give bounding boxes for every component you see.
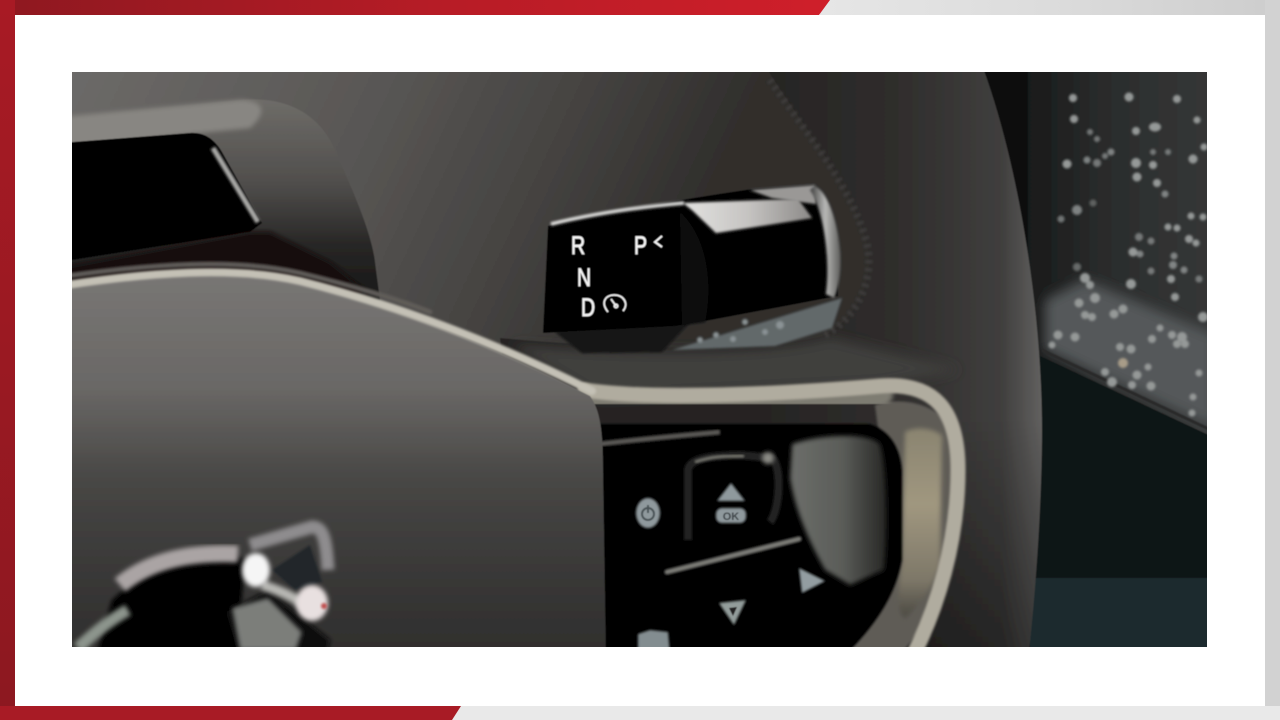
glossy panel reflection [790,436,887,585]
stalk body [543,185,838,333]
inner trim recess [852,400,952,647]
frame: left red bar [0,0,15,720]
icon: up button with OK [716,483,746,523]
frame: top bar [0,0,1280,15]
icon: down button [719,600,746,625]
frame: bottom bar [0,706,1280,720]
lower door teal reflection [1030,578,1207,647]
icon: speed gauge [604,295,626,312]
gear labels: N [577,264,591,292]
gear labels [571,232,647,322]
chrome end ring [810,186,841,298]
wheel hub [60,274,606,660]
silver trim left band [60,264,592,391]
beige inner trim [898,429,942,618]
wheel rim [500,60,1042,660]
view through gap under stalk [672,298,842,350]
rain droplets [1048,92,1208,416]
gear labels: R [571,232,585,260]
divider bar [667,539,799,572]
photo: steering wheel with gear selector stalk [60,60,1220,665]
control panel [600,424,902,660]
frame: right grey bar [1265,0,1280,720]
upper highlight [683,199,812,233]
logo on hub [78,527,330,660]
icon: power button [636,498,660,528]
gear labels: D [581,294,595,322]
dashboard background [72,72,870,354]
gear labels: P [634,232,647,260]
instrument hood [60,99,380,300]
icon: lower left button [636,628,671,647]
icon: right button [799,568,825,593]
gear stalk [543,185,841,353]
window with rain droplets [984,72,1207,647]
button surround [688,455,779,540]
icon: park indicator chevron [655,236,662,247]
icon: up button with OK: OK [723,511,739,523]
hood light upper strip [72,98,262,143]
door sill and lower door [1037,357,1207,578]
silver trim right band [585,386,958,665]
driver display screen [60,133,262,262]
